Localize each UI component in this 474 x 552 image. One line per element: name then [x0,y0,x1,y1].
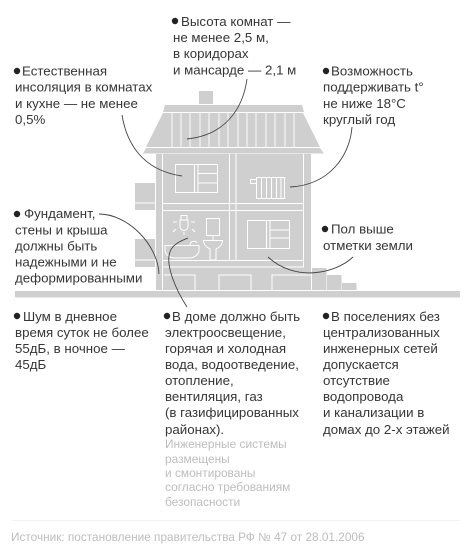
label: noise: время суток не более [15,325,149,340]
label: insolation: Естественная [22,64,107,78]
label: settlements: В поселениях без [331,309,440,324]
label: settlements: централизованных [323,325,440,340]
label: settlements: допускается [323,357,399,372]
side annexes [135,183,155,267]
label: utilities: вентиляция, газ [165,389,263,404]
walls [156,154,311,290]
source: Источник: постановление правительства РФ № 47 от 28.01.2006 [11,530,365,544]
label: floor [322,222,413,253]
label: noise: 55дБ, в ночное — [15,341,126,356]
sink and mirror [206,218,220,236]
label: ceiling height: и мансарде — 2,1 м [173,62,296,78]
label: insolation: 0,5% [15,112,45,127]
label: temperature: круглый год [323,112,395,127]
label: foundation: должны быть [15,238,97,253]
label: utilities: горячая и холодная [165,341,286,356]
house illustration [15,91,460,298]
label: utilities: отопление, [165,373,234,388]
label: insolation: и кухне — не менее [15,96,138,111]
label: foundation: надежными и не [15,254,117,269]
label: utilities: (в газифицированных [165,405,299,420]
label: foundation: деформированными [15,270,142,285]
bulb [180,216,188,230]
label: foundation: Фундамент, [24,206,95,221]
label: settlements: инженерных сетей [323,341,438,356]
label: utilities: электроосвещение, [165,325,286,340]
label: temperature: поддерживать t° [323,80,424,94]
chimney [199,91,213,104]
upper window [176,164,218,192]
label: settlements: отсутствие [323,373,390,388]
note: engineering systems: безопасности [165,495,240,509]
label: noise [14,309,149,372]
label: noise: Шум в дневное [23,309,117,324]
note: engineering systems: и смонтированы [165,466,255,480]
note: engineering systems [165,437,290,509]
label: ceiling height: не менее 2,5 м, [173,30,269,45]
label: insolation [14,64,153,127]
lower window [248,220,290,248]
label: ceiling height: Высота комнат — [181,14,291,29]
label: settlements [323,309,450,437]
label: noise: 45дБ [15,357,47,372]
ground [15,291,460,298]
label: utilities: вода, водоотведение, [165,357,299,372]
label: floor: отметки земли [323,238,413,253]
label: insolation: инсоляция в комнатах [15,80,153,94]
label: temperature [323,64,424,127]
label: utilities: районах). [165,422,224,437]
bath [165,246,199,258]
label: foundation [14,206,142,285]
label: settlements: водопровода [323,389,404,404]
label: temperature: не ниже 18°C [323,96,406,111]
radiator [250,178,284,198]
label: temperature: Возможность [331,64,413,78]
label: ceiling height [172,14,296,78]
note: engineering systems: Инженерные системы [165,437,287,451]
label: ceiling height: в коридорах [173,46,249,61]
label: settlements: домах до 2-х этажей [323,422,450,437]
steps [312,268,356,290]
roof [143,105,324,154]
label: utilities: В доме должно быть [172,309,300,324]
label: settlements: и канализации в [323,405,424,420]
note: engineering systems: размещены [165,452,230,466]
leader lines [99,79,353,307]
label: utilities [164,309,300,509]
interior lines [162,154,312,290]
label: foundation: стены и крыша [15,222,108,237]
note: engineering systems: согласно требованиям [165,480,290,494]
label: floor: Пол выше [331,222,394,236]
